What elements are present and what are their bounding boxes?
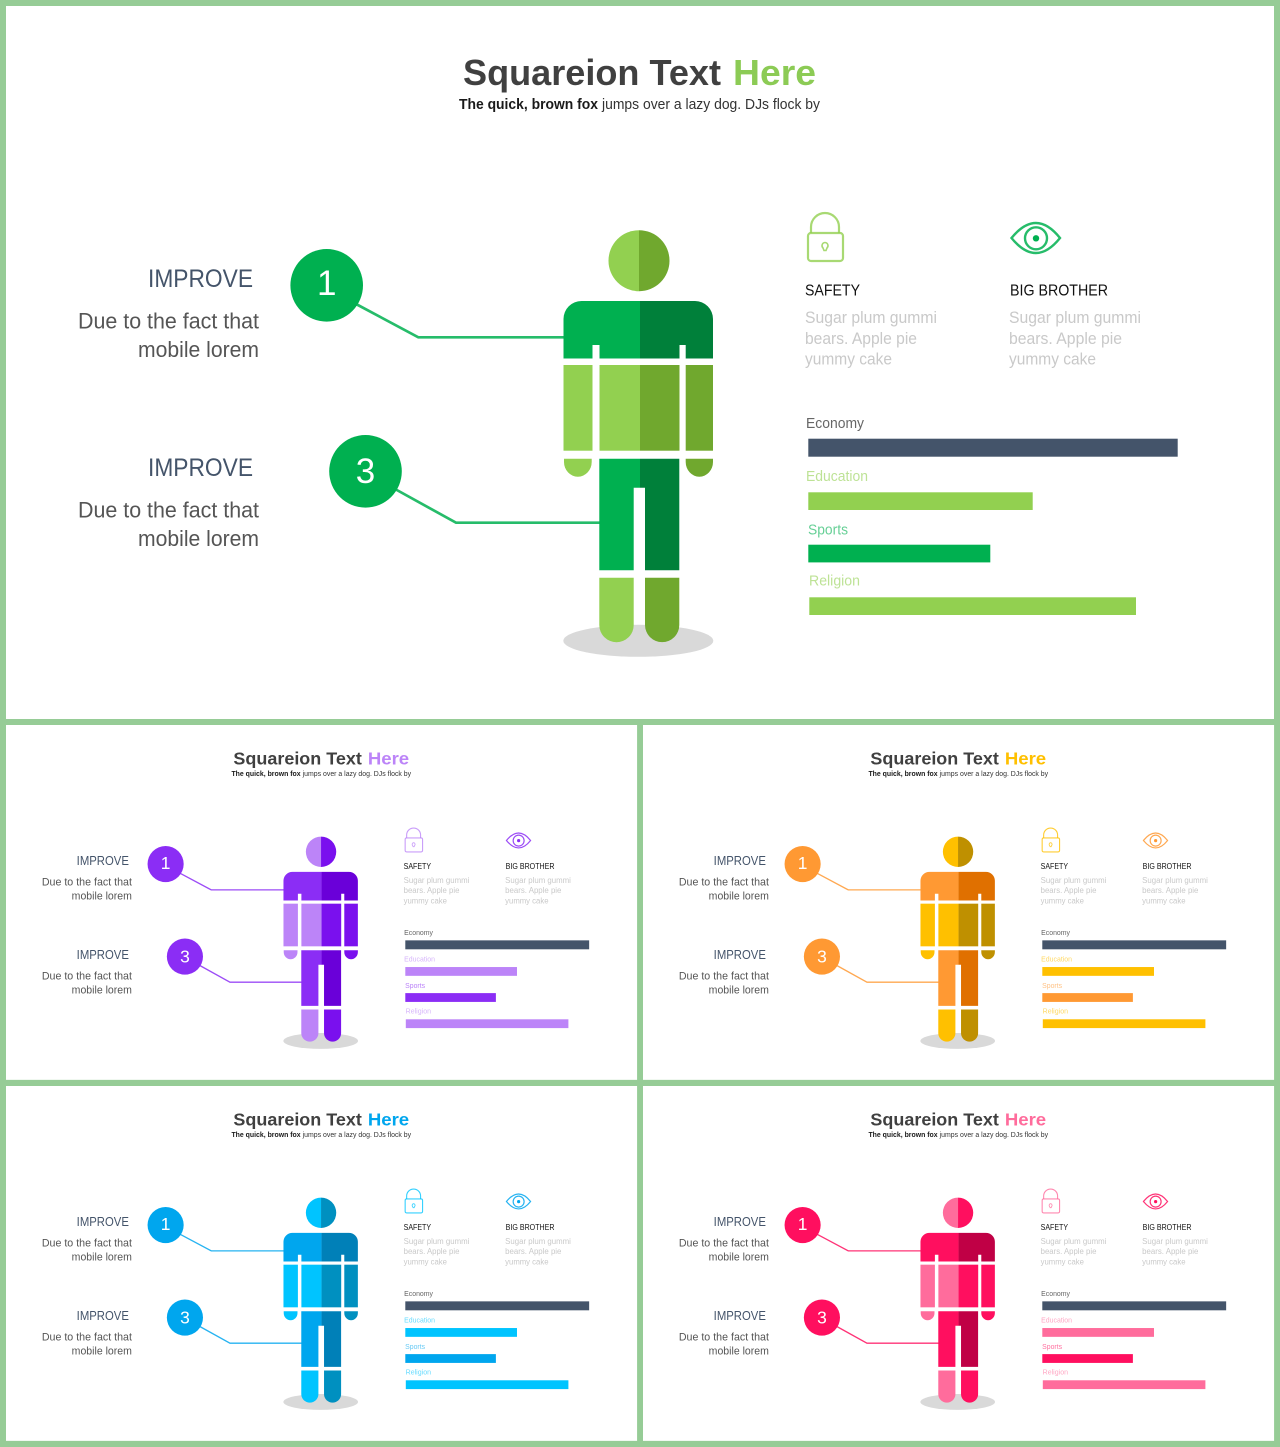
connector 1 (356, 304, 566, 337)
badge 1 (785, 846, 821, 882)
icon: lock (1042, 1189, 1060, 1213)
connector 1 (180, 1234, 285, 1251)
connector 3 (200, 1326, 302, 1343)
subtitle: jumps over a lazy dog. DJs flock by (302, 769, 411, 778)
bar chart (806, 415, 1178, 615)
bar chart: Sports (1042, 981, 1062, 990)
text block: improve 3: Due to the fact that (42, 971, 132, 983)
bar chart: Economy (404, 1289, 433, 1298)
connector 1 (817, 873, 922, 890)
badge 3: 3 (180, 946, 190, 966)
subtitle: jumps over a lazy dog. DJs flock by (939, 769, 1048, 778)
text block: safety: yummy cake (805, 350, 892, 368)
bar chart: Education (404, 954, 435, 963)
subtitle (231, 769, 411, 778)
text block: big brother (1142, 1223, 1208, 1266)
icon: lock (808, 213, 843, 261)
text block: improve 3 (679, 1309, 769, 1358)
badge 1 (148, 846, 184, 882)
text block: improve 3 (42, 1309, 132, 1358)
panel: blue (6, 1086, 637, 1441)
connector 3 (837, 1326, 939, 1343)
text block: big brother: Sugar plum gummi (505, 1237, 571, 1246)
title: Squareion Text (463, 52, 721, 93)
badge 1 (785, 1207, 821, 1243)
text block: safety (805, 282, 937, 368)
badge 3 (804, 939, 840, 975)
text block: improve 1: IMPROVE (714, 1215, 766, 1229)
subtitle (868, 769, 1048, 778)
connector 1 (817, 1234, 922, 1251)
text block: safety: yummy cake (1041, 896, 1084, 905)
connector 3 (395, 489, 601, 523)
text block: improve 3: Due to the fact that (42, 1332, 132, 1344)
subtitle: The quick, brown fox (459, 97, 598, 113)
bar chart (404, 928, 589, 1028)
text block: big brother: yummy cake (1009, 350, 1096, 368)
title: Squareion Text (233, 1109, 362, 1129)
connector 3 (200, 965, 302, 982)
text block: safety: bears. Apple pie (1041, 886, 1097, 895)
text block: safety (1041, 862, 1107, 905)
bar chart: Economy (1041, 1289, 1070, 1298)
text block: safety: Sugar plum gummi (805, 309, 937, 327)
text block: improve 1: mobile lorem (138, 337, 259, 362)
text block: big brother (505, 1223, 571, 1266)
panel: orange (643, 725, 1274, 1080)
badge 1 (148, 1207, 184, 1243)
bar chart: Economy (1041, 928, 1070, 937)
text block: safety: bears. Apple pie (805, 330, 917, 348)
text block: improve 3: Due to the fact that (679, 1332, 769, 1344)
text block: improve 1: mobile lorem (72, 1252, 132, 1264)
text block: improve 3: mobile lorem (709, 1346, 769, 1358)
badge 3 (329, 435, 402, 508)
text block: improve 1 (679, 1215, 769, 1264)
text block: safety: bears. Apple pie (404, 1247, 460, 1256)
icon: lock (405, 828, 423, 852)
text block: improve 1: Due to the fact that (679, 877, 769, 889)
text block: improve 3 (78, 454, 259, 551)
icon: lock (405, 1189, 423, 1213)
title: Here (368, 748, 409, 768)
text block: improve 3: Due to the fact that (679, 971, 769, 983)
title: Here (1005, 1109, 1046, 1129)
text block: safety: SAFETY (805, 282, 860, 300)
bar chart: Economy (404, 928, 433, 937)
subtitle: jumps over a lazy dog. DJs flock by (601, 97, 821, 113)
bar chart: Economy (806, 415, 864, 432)
text block: improve 1: mobile lorem (72, 891, 132, 903)
bar chart: Religion (1043, 1368, 1068, 1377)
text block: big brother: BIG BROTHER (506, 1223, 555, 1232)
bar chart: Sports (1042, 1342, 1062, 1351)
connector 3 (837, 965, 939, 982)
human figure (920, 1198, 995, 1410)
text block: big brother: bears. Apple pie (1142, 886, 1199, 895)
text block: safety: Sugar plum gummi (404, 876, 470, 885)
text block: improve 1: Due to the fact that (78, 308, 259, 334)
subtitle: jumps over a lazy dog. DJs flock by (939, 1130, 1048, 1139)
icon: eye (506, 833, 531, 848)
bar chart (1041, 928, 1226, 1028)
text block: big brother: yummy cake (505, 1257, 549, 1266)
subtitle: jumps over a lazy dog. DJs flock by (302, 1130, 411, 1139)
text block: improve 1: IMPROVE (714, 854, 766, 868)
text block: safety: SAFETY (404, 1223, 432, 1232)
bar chart: Education (1041, 1315, 1072, 1324)
text block: improve 3: mobile lorem (709, 985, 769, 997)
title: Here (733, 52, 816, 93)
badge 1: 1 (161, 853, 170, 873)
badge 3: 3 (817, 946, 827, 966)
icon: lock (1042, 828, 1060, 852)
text block: big brother: yummy cake (505, 896, 549, 905)
text block: big brother: bears. Apple pie (505, 1247, 562, 1256)
text block: big brother: bears. Apple pie (1142, 1247, 1199, 1256)
text block: big brother: BIG BROTHER (506, 862, 555, 871)
text block: safety (404, 862, 470, 905)
subtitle: The quick, brown fox (231, 769, 301, 778)
badge 1: 1 (798, 1214, 807, 1234)
title: Here (1005, 748, 1046, 768)
text block: improve 1 (78, 265, 259, 362)
icon: eye (1143, 833, 1168, 848)
text block: big brother: Sugar plum gummi (1009, 309, 1141, 327)
bar chart: Education (1041, 954, 1072, 963)
bar chart: Religion (1043, 1007, 1068, 1016)
text block: safety: bears. Apple pie (1041, 1247, 1097, 1256)
text block: improve 1: mobile lorem (709, 891, 769, 903)
bar chart (404, 1289, 589, 1389)
bar chart: Religion (406, 1007, 431, 1016)
text block: safety: Sugar plum gummi (404, 1237, 470, 1246)
bar chart (1041, 1289, 1226, 1389)
text block: big brother: BIG BROTHER (1010, 282, 1108, 300)
text block: improve 1: Due to the fact that (42, 877, 132, 889)
badge 1: 1 (317, 264, 336, 303)
badge 3: 3 (817, 1307, 827, 1327)
text block: safety: SAFETY (1041, 862, 1069, 871)
text block: improve 3: IMPROVE (148, 454, 253, 482)
panel: green main (6, 6, 1274, 719)
text block: safety (1041, 1223, 1107, 1266)
text block: improve 3: mobile lorem (138, 526, 259, 551)
text block: safety: yummy cake (404, 1257, 447, 1266)
human figure (563, 230, 713, 657)
connector 1 (180, 873, 285, 890)
bar chart: Religion (406, 1368, 431, 1377)
subtitle: The quick, brown fox (231, 1130, 301, 1139)
badge 3: 3 (180, 1307, 190, 1327)
text block: big brother: bears. Apple pie (505, 886, 562, 895)
title: Squareion Text (870, 748, 999, 768)
text block: big brother: bears. Apple pie (1009, 330, 1122, 348)
text block: improve 1 (42, 1215, 132, 1264)
text block: improve 1: Due to the fact that (679, 1238, 769, 1250)
text block: improve 3: mobile lorem (72, 985, 132, 997)
text block: improve 1 (679, 854, 769, 903)
text block: big brother (505, 862, 571, 905)
panel: pink (643, 1086, 1274, 1441)
text block: safety: yummy cake (1041, 1257, 1084, 1266)
badge 3 (167, 1300, 203, 1336)
subtitle (231, 1130, 411, 1139)
panel: purple (6, 725, 637, 1080)
icon: eye (506, 1194, 531, 1209)
text block: improve 3 (42, 948, 132, 997)
text block: big brother: BIG BROTHER (1143, 1223, 1192, 1232)
text block: improve 3: Due to the fact that (78, 498, 259, 522)
badge 3: 3 (356, 452, 375, 491)
human figure (283, 1198, 358, 1410)
text block: improve 3: mobile lorem (72, 1346, 132, 1358)
text block: improve 1: Due to the fact that (42, 1238, 132, 1250)
text block: improve 3: IMPROVE (714, 1309, 766, 1323)
text block: safety (404, 1223, 470, 1266)
text block: improve 1: IMPROVE (77, 1215, 129, 1229)
text block: safety: SAFETY (404, 862, 432, 871)
text block: improve 3: IMPROVE (77, 1309, 129, 1323)
bar chart: Sports (405, 1342, 425, 1351)
subtitle (459, 97, 821, 113)
title: Here (368, 1109, 409, 1129)
title: Squareion Text (870, 1109, 999, 1129)
bar chart: Education (404, 1315, 435, 1324)
text block: big brother: BIG BROTHER (1143, 862, 1192, 871)
text block: improve 3: IMPROVE (77, 948, 129, 962)
title: Squareion Text (233, 748, 362, 768)
text block: safety: Sugar plum gummi (1041, 1237, 1107, 1246)
bar chart: Religion (809, 573, 860, 590)
badge 1 (290, 249, 363, 322)
text block: improve 3: IMPROVE (714, 948, 766, 962)
human figure (283, 837, 358, 1049)
text block: big brother: Sugar plum gummi (1142, 876, 1208, 885)
text block: improve 1 (42, 854, 132, 903)
subtitle: The quick, brown fox (868, 1130, 938, 1139)
text block: improve 3 (679, 948, 769, 997)
bar chart: Education (806, 468, 868, 485)
icon: eye (1143, 1194, 1168, 1209)
bar chart: Sports (808, 521, 848, 538)
subtitle: The quick, brown fox (868, 769, 938, 778)
text block: safety: SAFETY (1041, 1223, 1069, 1232)
text block: big brother: Sugar plum gummi (505, 876, 571, 885)
icon: eye (1012, 223, 1060, 253)
text block: safety: yummy cake (404, 896, 447, 905)
badge 3 (167, 939, 203, 975)
subtitle (868, 1130, 1048, 1139)
text block: big brother (1142, 862, 1208, 905)
bar chart: Sports (405, 981, 425, 990)
badge 1: 1 (161, 1214, 170, 1234)
text block: big brother (1009, 282, 1141, 368)
text block: improve 1: mobile lorem (709, 1252, 769, 1264)
text block: big brother: yummy cake (1142, 1257, 1186, 1266)
badge 1: 1 (798, 853, 807, 873)
text block: safety: Sugar plum gummi (1041, 876, 1107, 885)
text block: safety: bears. Apple pie (404, 886, 460, 895)
text block: improve 1: IMPROVE (148, 265, 253, 293)
badge 3 (804, 1300, 840, 1336)
text block: improve 1: IMPROVE (77, 854, 129, 868)
text block: big brother: Sugar plum gummi (1142, 1237, 1208, 1246)
human figure (920, 837, 995, 1049)
text block: big brother: yummy cake (1142, 896, 1186, 905)
